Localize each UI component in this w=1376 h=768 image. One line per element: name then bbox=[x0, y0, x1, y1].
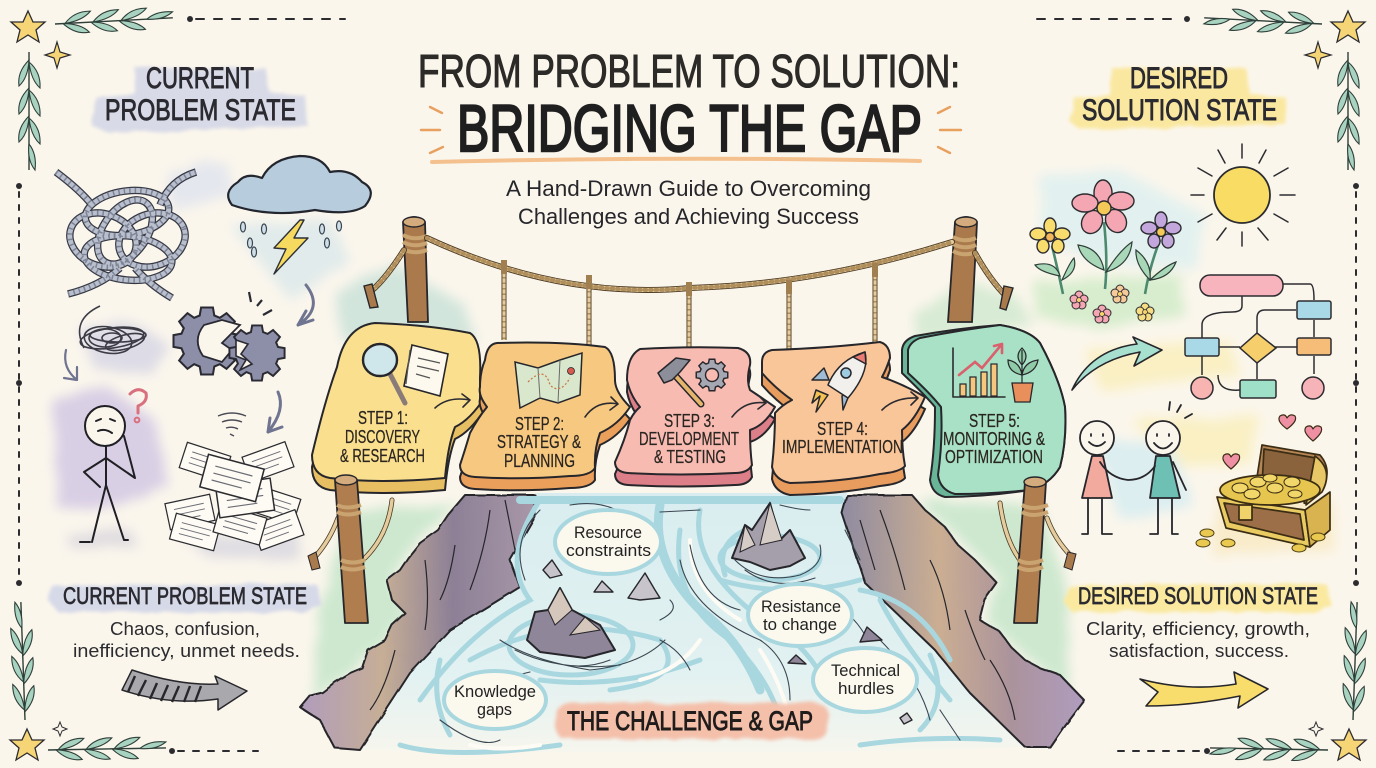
icon: handshake people bbox=[1080, 402, 1192, 534]
bubble: technical hurdles bbox=[813, 648, 917, 712]
icon: flower garden bbox=[1030, 180, 1181, 323]
caption: current problem state: Chaos, confusion, bbox=[110, 619, 260, 639]
stone 2: STRATEGY & bbox=[497, 432, 581, 452]
heading: desired solution state: SOLUTION STATE bbox=[1082, 94, 1277, 127]
stone 4: IMPLEMENTATION bbox=[782, 437, 903, 457]
subtitle: A Hand-Drawn Guide to Overcoming bbox=[506, 176, 871, 201]
caption: current problem state bbox=[48, 583, 322, 661]
stone 3: DEVELOPMENT bbox=[639, 429, 739, 449]
heading: desired solution state: DESIRED bbox=[1130, 62, 1228, 95]
icon: magnifier and notebook bbox=[363, 344, 448, 403]
arrow: scribble to figure bbox=[64, 350, 77, 380]
panel: desired solution state bbox=[1030, 62, 1335, 708]
washes behind icons bbox=[1035, 170, 1335, 555]
arrow: storm to gears bbox=[298, 285, 313, 325]
stone 5 bbox=[902, 325, 1065, 497]
heading: desired solution state bbox=[1068, 62, 1287, 130]
bubble: resource constraints: Resource bbox=[574, 523, 642, 542]
front right post bbox=[1000, 477, 1076, 623]
river currents bbox=[400, 500, 1000, 752]
stone 2: PLANNING bbox=[504, 451, 575, 471]
title underline wash bbox=[432, 159, 920, 162]
bubble: resistance to change bbox=[748, 584, 852, 646]
bubble: resource constraints: constraints bbox=[566, 541, 651, 560]
right cliff bbox=[842, 495, 1084, 747]
back left post bbox=[403, 217, 428, 322]
icon: tangled rope knot bbox=[56, 172, 196, 298]
bubble: knowledge gaps: Knowledge bbox=[454, 682, 536, 701]
bubble: resistance to change: Resistance bbox=[761, 597, 841, 616]
stone 3 bbox=[615, 347, 775, 486]
hanger ropes bbox=[504, 260, 875, 350]
chart: flowchart bbox=[1185, 275, 1331, 399]
label: the challenge and gap bbox=[556, 703, 827, 739]
icon: sun bbox=[1191, 144, 1295, 246]
title line 2: BRIDGING THE GAP bbox=[457, 91, 922, 165]
title sparks bbox=[421, 107, 961, 153]
front left post bbox=[308, 475, 392, 623]
stone 3: STEP 3: bbox=[664, 411, 715, 431]
back right post bbox=[948, 217, 977, 322]
subtitle bbox=[506, 176, 871, 229]
panel: current problem state bbox=[48, 62, 371, 710]
bubble: technical hurdles: hurdles bbox=[838, 679, 894, 698]
bubble: resource constraints bbox=[555, 510, 661, 574]
corner: top left bbox=[11, 7, 173, 170]
illustration: rope bridge bbox=[308, 217, 1076, 623]
bubble: knowledge gaps bbox=[444, 671, 546, 729]
label: the challenge and gap: THE CHALLENGE & GAP bbox=[567, 706, 813, 736]
rock: large right bbox=[732, 503, 805, 570]
arrow: yellow bbox=[1140, 672, 1268, 708]
icon: broken gears bbox=[174, 292, 285, 381]
stone 1 bbox=[312, 323, 485, 493]
icon: scattered papers bbox=[165, 392, 304, 551]
rock: large left bbox=[527, 588, 615, 658]
caption: desired solution state: satisfaction, success. bbox=[1109, 641, 1289, 661]
heading: current problem state: CURRENT bbox=[146, 62, 254, 95]
icon: rocket bbox=[812, 352, 866, 412]
heading: current problem state: PROBLEM STATE bbox=[105, 94, 296, 127]
stone 2: STEP 2: bbox=[515, 414, 564, 434]
stone 5: MONITORING & bbox=[943, 429, 1045, 449]
title line 1: FROM PROBLEM TO SOLUTION: bbox=[418, 45, 960, 97]
stone 1: STEP 1: bbox=[358, 408, 408, 428]
title block bbox=[418, 45, 961, 229]
arrow: teal sweep bbox=[1072, 337, 1162, 390]
stone 5: STEP 5: bbox=[969, 411, 1020, 431]
stone 3: & TESTING bbox=[654, 447, 726, 467]
illustration: river gorge bbox=[300, 493, 1084, 752]
grass washes bbox=[312, 265, 1070, 700]
corner: bottom right bbox=[1210, 602, 1367, 761]
stone 5: OPTIMIZATION bbox=[945, 447, 1043, 467]
corner: bottom left bbox=[10, 602, 166, 760]
caption: current problem state: inefficiency, unmet needs. bbox=[73, 641, 300, 661]
bubble: knowledge gaps: gaps bbox=[477, 700, 512, 719]
left cliff bbox=[300, 495, 535, 750]
stone 1: DISCOVERY bbox=[345, 427, 420, 447]
stakes bbox=[364, 284, 1013, 310]
corner: top right bbox=[1204, 8, 1365, 170]
icon: treasure chest bbox=[1196, 415, 1330, 552]
stone 2 bbox=[460, 342, 630, 490]
subtitle: Challenges and Achieving Success bbox=[518, 204, 859, 229]
icon: hammer and gear bbox=[658, 358, 728, 404]
bubble: resistance to change: to change bbox=[763, 615, 837, 634]
caption: desired solution state: Clarity, efficiency, growth, bbox=[1086, 619, 1310, 639]
washes behind icons bbox=[52, 160, 350, 558]
bubble: technical hurdles: Technical bbox=[831, 661, 900, 680]
river bbox=[360, 493, 1025, 752]
rope: main and stays bbox=[370, 238, 1006, 296]
icon: storm cloud bbox=[228, 156, 371, 274]
icon: map bbox=[515, 353, 582, 408]
caption: current problem state: CURRENT PROBLEM STATE bbox=[63, 583, 307, 610]
stone 4: STEP 4: bbox=[817, 419, 868, 439]
icon: growth chart and plant bbox=[953, 344, 1038, 402]
icon: confused stick figure bbox=[80, 390, 146, 542]
caption: desired solution state bbox=[1062, 583, 1332, 661]
heading: current problem state bbox=[92, 62, 308, 133]
small rocks bbox=[543, 560, 912, 724]
stone 4 bbox=[762, 342, 925, 495]
arrow: sketchy dark arrow bbox=[122, 670, 247, 710]
icon: scribble bbox=[79, 306, 146, 357]
stone 1: & RESEARCH bbox=[340, 446, 425, 466]
